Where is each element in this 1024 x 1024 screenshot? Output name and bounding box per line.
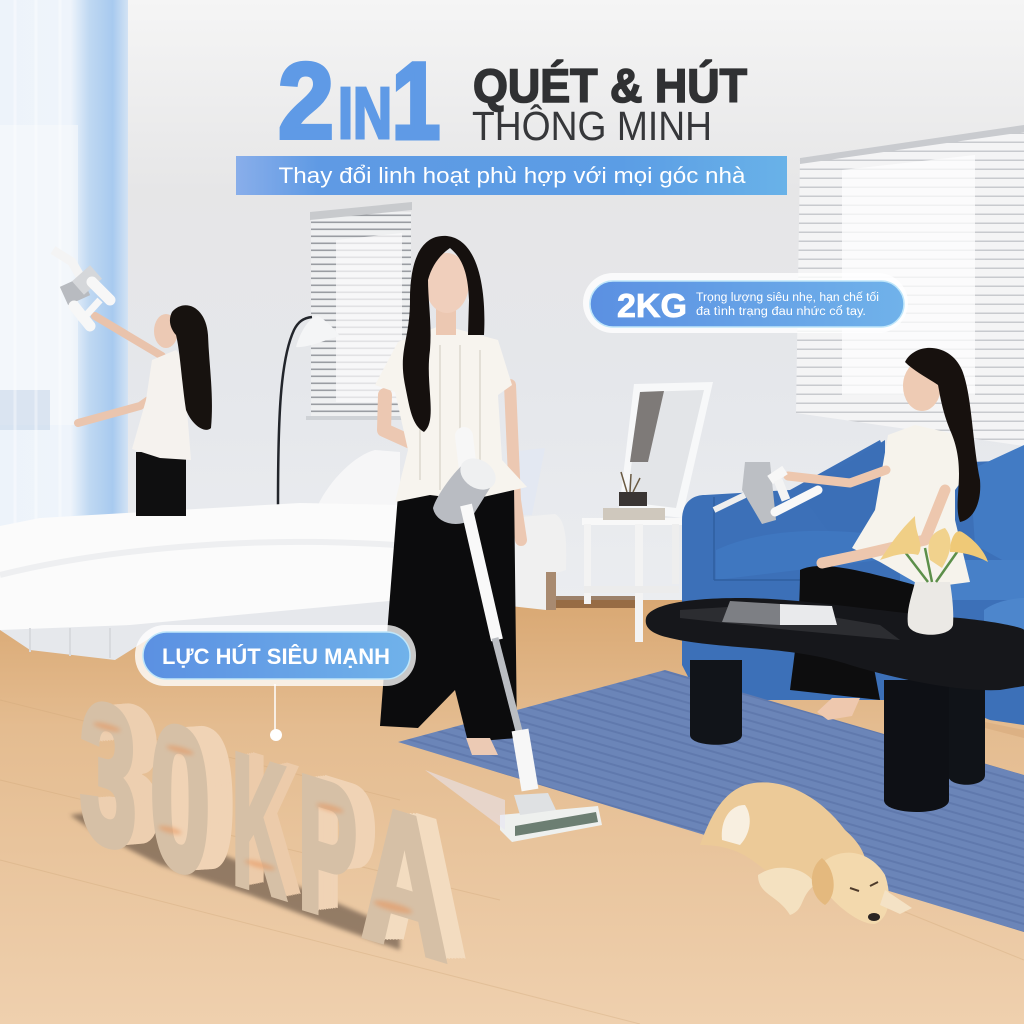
face bbox=[154, 314, 178, 348]
sofa bbox=[682, 440, 1024, 725]
vase with yellow flowers bbox=[880, 516, 988, 635]
callout: suction power bbox=[135, 625, 416, 686]
heading: 2IN1: IN bbox=[338, 74, 392, 154]
eyes bbox=[850, 882, 878, 891]
blouse bbox=[375, 325, 527, 502]
woman on left cleaning curtains bbox=[78, 305, 212, 516]
3D wooden text 30KPA: K bbox=[232, 715, 285, 937]
handle bbox=[464, 436, 468, 470]
callout: 2KG weight: Trọng lượng siêu nhẹ, hạn chế tối bbox=[696, 292, 879, 304]
trousers bbox=[136, 452, 186, 516]
left curtain bbox=[0, 0, 128, 528]
3D wooden text 30KPA: A bbox=[362, 763, 447, 1001]
subtitle banner: Thay đổi linh hoạt phù hợp với mọi góc nhà bbox=[278, 163, 746, 188]
tube white bbox=[466, 505, 497, 640]
paw bbox=[880, 890, 912, 914]
heading: 2IN1: 1 bbox=[392, 40, 440, 161]
far leg bbox=[948, 680, 985, 785]
neck bbox=[520, 730, 530, 790]
bed bbox=[0, 448, 566, 660]
arm lowered bbox=[78, 392, 160, 423]
floor head bbox=[500, 806, 602, 842]
woman on the right sitting on sofa bbox=[788, 348, 980, 720]
blouse bbox=[132, 350, 191, 460]
arm raised bbox=[95, 316, 162, 356]
callout: 2KG weight bbox=[583, 273, 908, 333]
skirting board bbox=[552, 596, 642, 608]
hair bbox=[403, 236, 484, 432]
callout: 2KG weight: 2KG bbox=[617, 287, 687, 324]
front leg bbox=[758, 868, 815, 915]
table top bbox=[646, 598, 1024, 690]
right arm bbox=[510, 385, 521, 540]
face bbox=[903, 361, 941, 411]
feet bbox=[466, 738, 498, 755]
blouse bbox=[852, 425, 970, 588]
wooden floor bbox=[0, 600, 1024, 1024]
heading: 2IN1 bbox=[278, 40, 440, 161]
wooden floor strip behind table bbox=[985, 722, 1024, 738]
blue rug bbox=[398, 670, 1024, 932]
stick vacuum at centre bbox=[425, 436, 602, 842]
callout: 2KG weight: đa tình trạng đau nhức cổ tay. bbox=[696, 306, 866, 318]
heading: Thông Minh: THÔNG MINH bbox=[472, 103, 712, 149]
hair bbox=[170, 305, 212, 430]
connector line and dot bbox=[270, 684, 282, 741]
woman at centre bbox=[375, 236, 527, 755]
ear bbox=[812, 858, 834, 905]
window with blinds: right bbox=[796, 125, 1024, 446]
3D wooden text 30KPA: 3 bbox=[80, 658, 136, 893]
black coffee table bbox=[646, 598, 1024, 812]
room wall bbox=[0, 0, 1024, 640]
front leg bbox=[884, 680, 949, 812]
left arm bbox=[384, 395, 456, 456]
heading: Quét & Hút: QUÉT & HÚT bbox=[473, 59, 747, 112]
tube metal bbox=[495, 638, 520, 735]
trousers bbox=[790, 566, 915, 700]
window with blinds: centre bbox=[306, 202, 414, 420]
body bbox=[700, 782, 866, 883]
3D wooden text 30KPA: 0 bbox=[150, 679, 210, 920]
callout: suction power: LỰC HÚT SIÊU MẠNH bbox=[162, 644, 390, 669]
open book on table bbox=[722, 601, 837, 625]
3D wooden text 30KPA: P bbox=[298, 735, 357, 963]
dust cup bbox=[433, 462, 495, 524]
golden retriever dog bbox=[700, 782, 912, 924]
side table with books and plant bbox=[582, 472, 682, 642]
left leg bbox=[690, 660, 742, 745]
mirror leaning on the wall bbox=[619, 382, 713, 518]
hind leg bbox=[722, 805, 750, 845]
head bbox=[820, 853, 889, 924]
nose bbox=[868, 913, 880, 921]
floor lamp bbox=[278, 316, 340, 505]
shadows under wooden letters bbox=[70, 810, 400, 950]
heading: 2IN1: 2 bbox=[278, 40, 334, 161]
light beam bbox=[425, 770, 505, 830]
face bbox=[425, 253, 469, 313]
neck bbox=[436, 305, 456, 335]
handheld vacuum: left bbox=[53, 250, 110, 326]
arm to knee bbox=[822, 490, 945, 563]
hair bbox=[905, 348, 980, 522]
table reflection bbox=[680, 605, 900, 640]
subtitle banner bbox=[236, 156, 787, 195]
feet bbox=[817, 698, 860, 720]
trousers bbox=[380, 485, 517, 742]
handheld vacuum on right bbox=[714, 462, 818, 524]
arm to vacuum bbox=[788, 470, 886, 483]
